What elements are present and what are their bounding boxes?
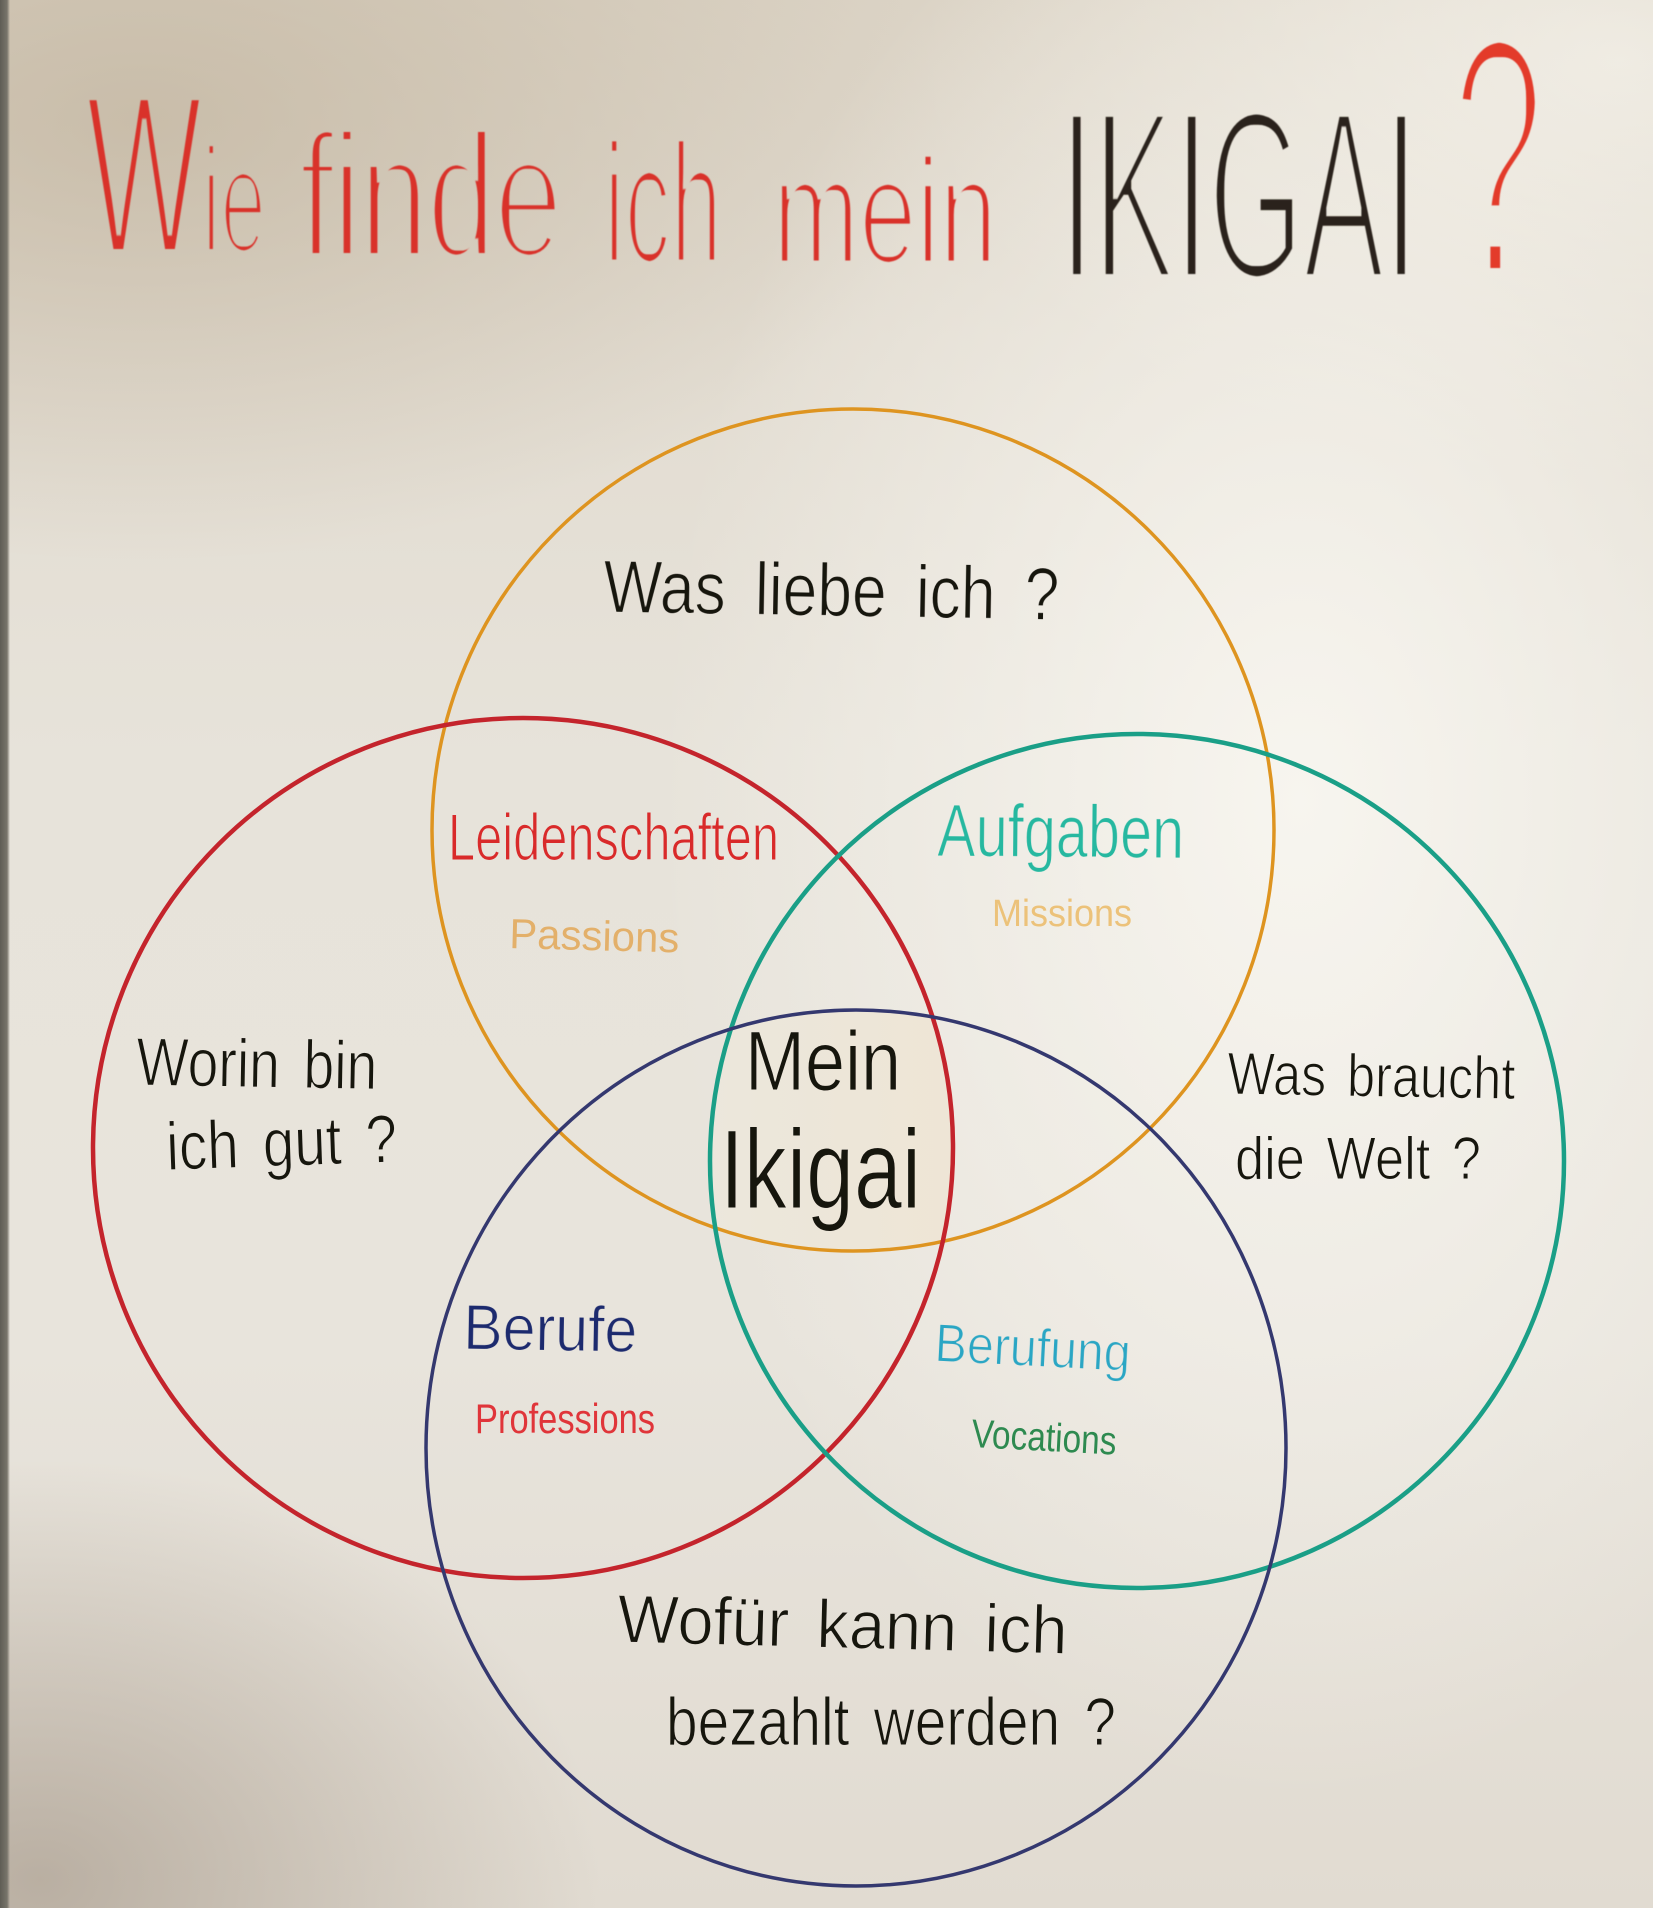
question: Wofür kann ich bezahlt werden? [617,1581,1116,1760]
question: Was liebe ich?: Was liebe ich ? [603,545,1060,636]
question: Was braucht die Welt?: die Welt ? [1235,1125,1481,1192]
overlap label: Leidenschaften / Passions [448,800,779,961]
question: Was braucht die Welt? [1227,1040,1516,1192]
question: Wofür kann ich bezahlt werden?: bezahlt werden ? [666,1684,1116,1760]
overlap label: Aufgaben / Missions: Missions [992,893,1132,935]
circle: red [93,718,953,1578]
overlap label: Leidenschaften / Passions: Passions [509,910,680,961]
circle: navy [426,1010,1286,1886]
overlap label: Berufung / Vocations: Vocations [971,1412,1118,1464]
question: Was braucht die Welt?: Was braucht [1227,1040,1516,1112]
question: Worin bin ich gut?: Worin bin [136,1024,378,1104]
center label: Mein Ikigai [720,1014,921,1232]
title word: Wie: Wie [86,48,266,300]
overlap label: Berufung / Vocations [933,1313,1132,1464]
question: Worin bin ich gut?: ich gut ? [165,1101,398,1185]
overlap label: Berufe / Professions: Berufe [463,1291,638,1366]
title word: mein: mein [773,127,997,295]
title [86,0,1544,347]
title word: ich: ich [604,109,722,299]
overlap label: Berufe / Professions: Professions [475,1395,655,1442]
question: Wofür kann ich bezahlt werden?: Wofür kann ich [617,1581,1068,1669]
overlap label: Leidenschaften / Passions: Leidenschaften [448,800,779,874]
question: Worin bin ich gut? [136,1024,398,1185]
overlap label: Aufgaben / Missions [937,789,1185,935]
title word: finde: finde [300,96,562,295]
center label: Mein Ikigai: Mein [745,1014,901,1108]
center shading: Ikigai overlap [848,1012,950,1248]
overlap label: Berufe / Professions [463,1291,655,1442]
circle: orange [432,409,1274,1251]
circle: teal [710,734,1564,1588]
overlap label: Berufung / Vocations: Berufung [933,1313,1132,1383]
center label: Mein Ikigai: Ikigai [720,1107,921,1232]
overlap label: Aufgaben / Missions: Aufgaben [937,789,1185,874]
